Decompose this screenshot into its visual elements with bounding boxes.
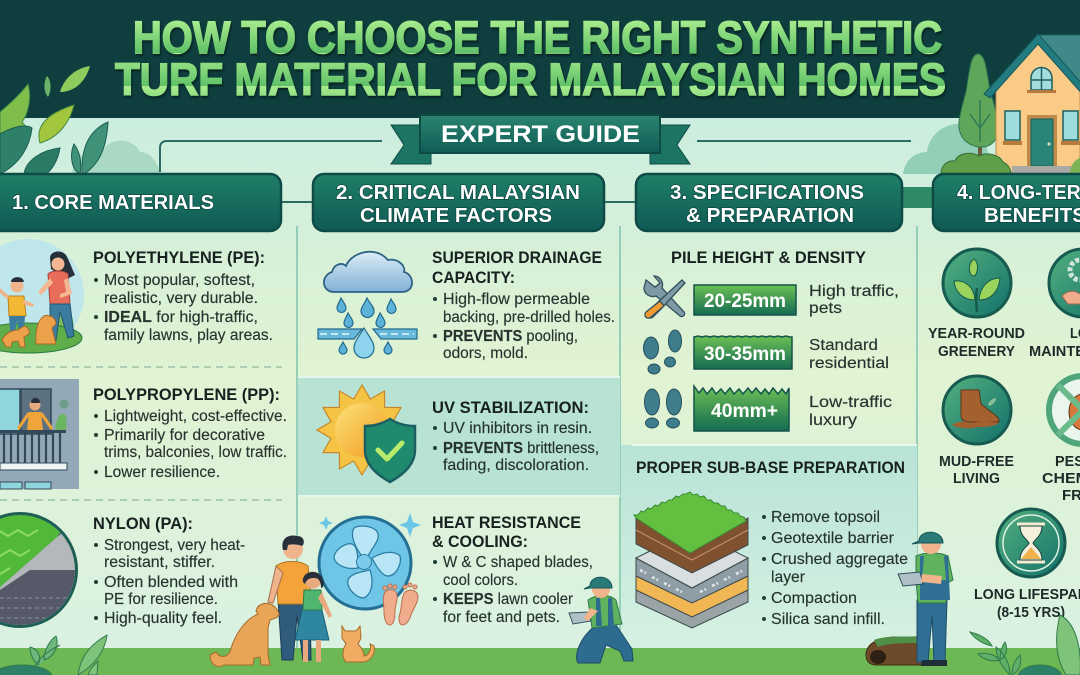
section header: 3. specifications and preparation: 3. SPECIFICATIONS: [670, 182, 864, 204]
expert guide connector lines: [160, 141, 911, 172]
title: [115, 12, 946, 105]
benefit: long lifespan: [974, 509, 1080, 621]
material: nylon: Often blended with: [104, 574, 238, 591]
title banner: [0, 0, 1080, 118]
title: TURF MATERIAL FOR MALAYSIAN HOMES: [115, 54, 946, 105]
item: heat resistance: HEAT RESISTANCE: [432, 514, 581, 532]
badge: 40mm+: [694, 386, 789, 431]
badge: 40mm+: 40mm+: [711, 401, 778, 422]
material: polyethylene: family lawns, play areas.: [104, 327, 273, 344]
panel: long-term benefits: [928, 249, 1080, 621]
material: polyethylene: IDEAL for high-traffic,: [104, 309, 258, 326]
label: high traffic: High traffic,: [809, 283, 899, 300]
label: standard residential: Standard: [809, 337, 878, 354]
benefit: long lifespan: (8-15 YRS): [997, 605, 1065, 621]
item: heat resistance: W & C shaped blades,: [443, 554, 593, 571]
material: nylon: PE for resilience.: [104, 591, 218, 608]
material: polyethylene: Most popular, softest,: [104, 272, 255, 289]
title: HOW TO CHOOSE THE RIGHT SYNTHETIC: [133, 12, 942, 63]
sub-base steps: Geotextile barrier: [771, 530, 895, 547]
section header: 4. long-term benefits: BENEFITS: [984, 205, 1080, 227]
item: drainage: PREVENTS pooling,: [443, 328, 578, 345]
sub-base steps: Silica sand infill.: [771, 611, 885, 628]
house with tree and bushes: [941, 34, 1080, 174]
material: nylon: resistant, stiffer.: [104, 554, 215, 571]
section header: 3. specifications and preparation: & PREPARATION: [686, 205, 854, 227]
section header: 1. core materials: 1. CORE MATERIALS: [12, 192, 214, 214]
item: heat resistance: KEEPS lawn cooler: [443, 591, 574, 608]
item: drainage: SUPERIOR DRAINAGE: [432, 249, 602, 267]
section header: 1. core materials: [0, 174, 281, 231]
item: heat resistance: for feet and pets.: [443, 609, 560, 626]
ribbon label: EXPERT GUIDE: [441, 121, 640, 148]
benefit: year-round greenery: GREENERY: [938, 344, 1015, 360]
icon: house: [984, 34, 1080, 174]
item: heat resistance: & COOLING:: [432, 533, 528, 551]
heading: proper sub-base preparation: PROPER SUB-BASE PREPARATION: [636, 459, 905, 477]
benefit: mud-free living: LIVING: [953, 471, 1000, 487]
material: polyethylene: POLYETHYLENE (PE):: [93, 249, 265, 267]
illustration: standing worker with tablet: [898, 532, 953, 666]
label: high traffic: [809, 283, 899, 317]
plants: bottom right: [970, 615, 1080, 675]
label: low-traffic luxury: luxury: [809, 412, 857, 429]
section header: 2. critical malaysian climate factors: CLIMATE FACTORS: [360, 205, 552, 227]
heading: pile height and density: PILE HEIGHT & DENSITY: [671, 249, 866, 267]
badge: 30-35mm: [694, 336, 792, 369]
icon: nylon turf cross-section: [0, 505, 80, 630]
label: high traffic: pets: [809, 300, 842, 317]
label: low-traffic luxury: [809, 394, 892, 429]
icon: bushes: [941, 153, 1011, 174]
benefit: year-round greenery: YEAR-ROUND: [928, 326, 1025, 342]
background hills: [72, 124, 989, 174]
item: drainage: backing, pre-drilled holes.: [443, 309, 615, 326]
icon: layered sub-base diagram: [634, 492, 748, 628]
item: uv stabilization: fading, discoloration.: [443, 457, 589, 474]
item: heat resistance: cool colors.: [443, 572, 518, 589]
section header: 2. critical malaysian climate factors: [313, 174, 604, 231]
benefit: low maintenance: [1029, 249, 1080, 360]
benefit: pesticide chemical free: [1042, 376, 1080, 504]
icon: sun and shield: [317, 385, 415, 482]
icon: wrench and screwdriver: [644, 276, 685, 318]
label: standard residential: [809, 337, 889, 372]
column dividers: [297, 226, 917, 650]
item: uv stabilization: [432, 399, 599, 474]
item: drainage: [432, 249, 615, 362]
expert guide ribbon: [391, 115, 690, 164]
sub-base steps: Compaction: [771, 590, 857, 607]
illustration: turf roll: [866, 636, 922, 665]
item: uv stabilization: PREVENTS brittleness,: [443, 440, 599, 457]
icon: family on lawn: [0, 238, 85, 353]
section header: 2. critical malaysian climate factors: 2. CRITICAL MALAYSIAN: [336, 182, 580, 204]
item: uv stabilization: UV STABILIZATION:: [432, 399, 589, 417]
icon: footprints side by side: [644, 389, 682, 428]
badge: 30-35mm: 30-35mm: [704, 344, 786, 365]
material: nylon: NYLON (PA):: [93, 515, 193, 533]
illustration: family with pets: [210, 536, 374, 667]
sub-base steps: [762, 509, 908, 628]
section header: 4. long-term benefits: [933, 174, 1080, 231]
benefit: year-round greenery: [928, 249, 1025, 360]
icon: rain cloud and drainage: [318, 252, 417, 358]
material: polypropylene: Lightweight, cost-effective.: [104, 408, 287, 425]
material: polypropylene: Lower resilience.: [104, 464, 220, 481]
material: polypropylene: POLYPROPYLENE (PP):: [93, 386, 280, 404]
material: polypropylene: [93, 386, 287, 481]
material: polyethylene: realistic, very durable.: [104, 290, 258, 307]
material: nylon: High-quality feel.: [104, 610, 222, 627]
icon: footprints staggered: [644, 330, 682, 374]
panel: specifications and preparation: [621, 249, 917, 650]
badge: 20-25mm: [694, 285, 796, 315]
girl: [295, 572, 332, 662]
badge: 20-25mm: 20-25mm: [704, 291, 786, 312]
item: uv stabilization: UV inhibitors in resin.: [443, 420, 592, 437]
material: nylon: [93, 515, 245, 627]
sub-base steps: Crushed aggregate: [771, 551, 908, 568]
sub-base steps: layer: [771, 569, 806, 586]
grass ground strip: [0, 648, 1080, 675]
item: drainage: CAPACITY:: [432, 269, 515, 287]
cat: [342, 626, 374, 662]
item: drainage: High-flow permeable: [443, 291, 590, 308]
material: nylon: Strongest, very heat-: [104, 537, 245, 554]
panel: climate factors: [298, 249, 620, 626]
material: polypropylene: Primarily for decorative: [104, 427, 265, 444]
icon: tree: [959, 54, 998, 156]
label: standard residential: residential: [809, 355, 889, 372]
leaves: top left: [0, 66, 108, 174]
benefit: mud-free living: MUD-FREE: [939, 454, 1014, 470]
benefit: mud-free living: [939, 376, 1014, 487]
plants: bottom left: [0, 635, 107, 675]
section header: 3. specifications and preparation: [636, 174, 902, 231]
illustration: kneeling worker with tablet: [569, 577, 633, 663]
header connectors: [281, 187, 933, 208]
dog: [210, 603, 279, 667]
man: [268, 536, 312, 660]
item: heat resistance: [432, 514, 593, 626]
material: polyethylene: [93, 249, 273, 344]
label: low-traffic luxury: Low-traffic: [809, 394, 892, 411]
panel: core materials: [0, 238, 287, 630]
icon: balcony scene: [0, 379, 79, 489]
material: polypropylene: trims, balconies, low traffic.: [104, 444, 287, 461]
item: drainage: odors, mold.: [443, 345, 528, 362]
sub-base steps: Remove topsoil: [771, 509, 880, 526]
icon: cooling fan and feet: [319, 513, 421, 625]
